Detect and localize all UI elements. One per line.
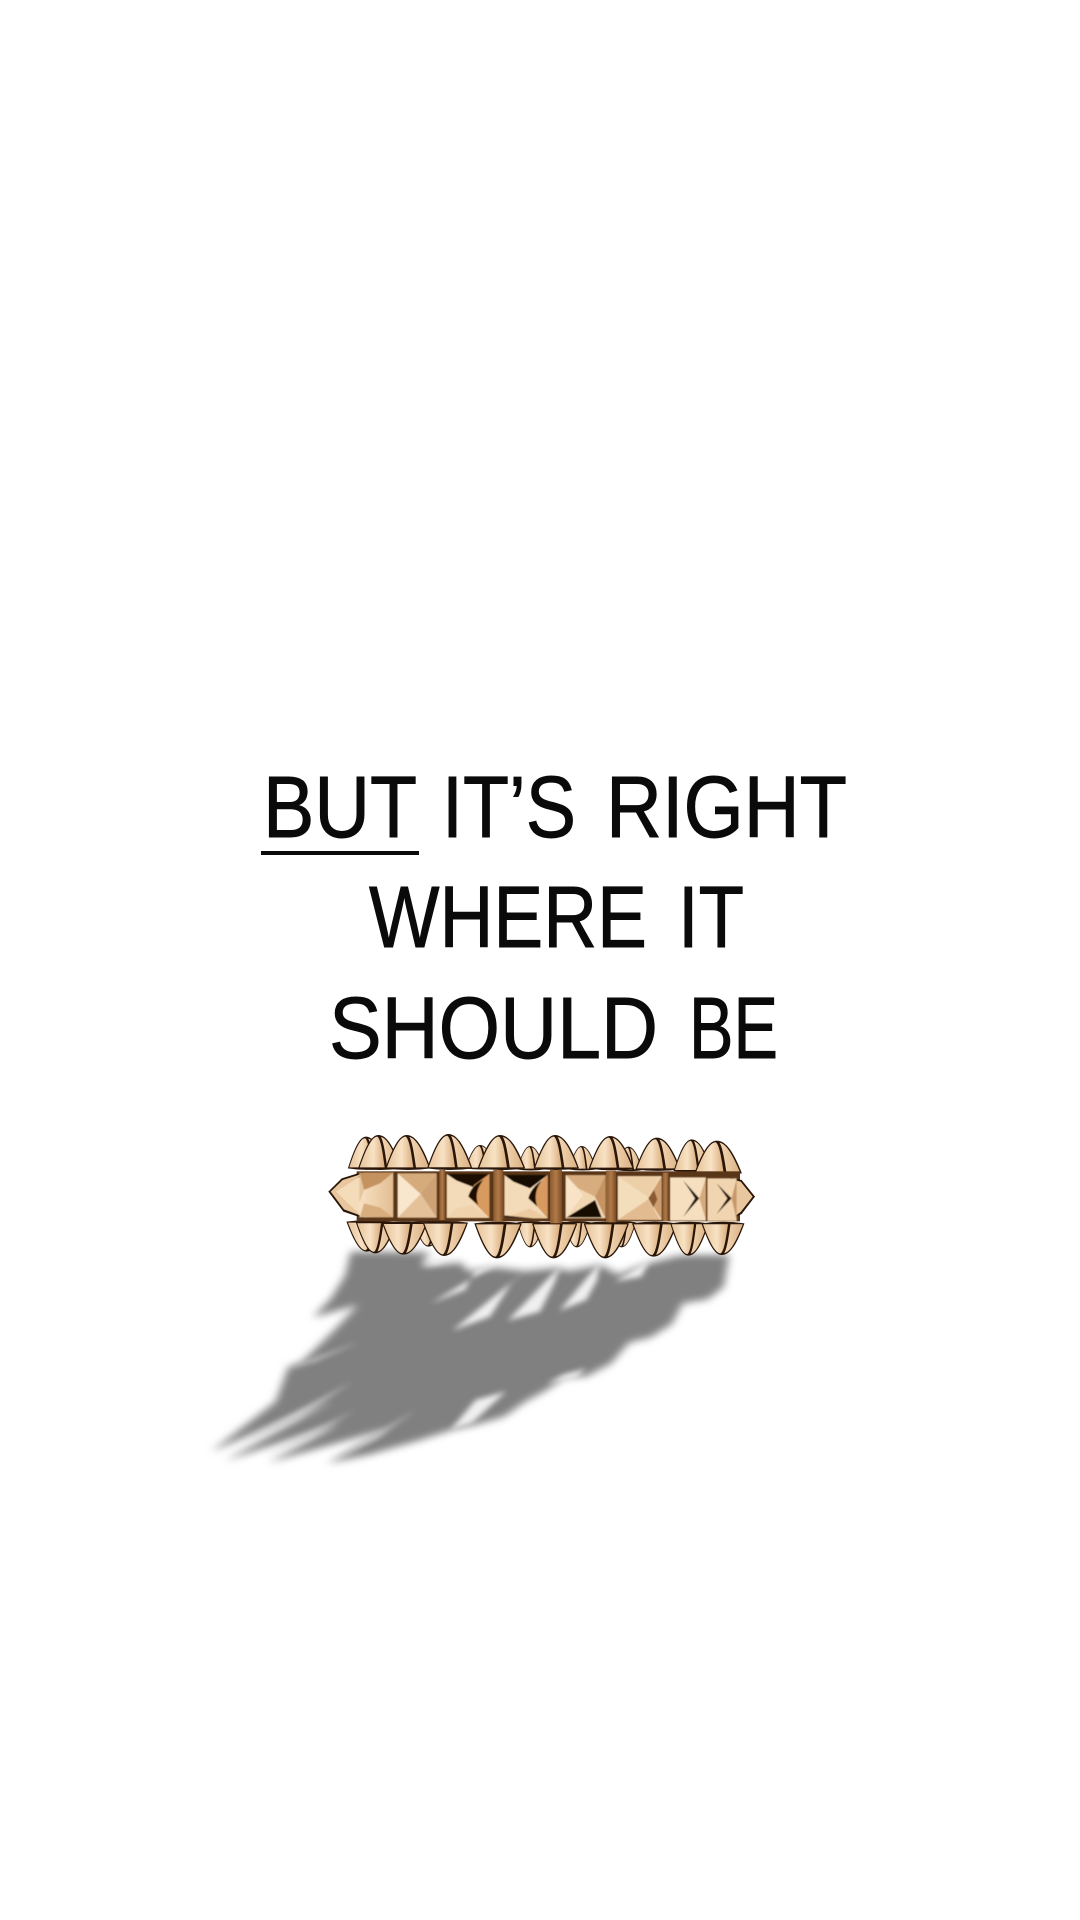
heading: but it's right where it should be: IT’S — [442, 759, 576, 856]
ring: bottom row of spikes — [356, 1221, 744, 1258]
heading: but it's right where it should be: BE — [689, 980, 778, 1077]
ring: right end tip — [730, 1177, 755, 1220]
ring: connecting bars — [439, 1170, 669, 1223]
ring: square studs — [359, 1173, 737, 1221]
ring: rear small spikes — [346, 1137, 643, 1252]
stud 1 — [359, 1173, 393, 1217]
ring: left end tip — [328, 1172, 363, 1218]
stud 2 — [398, 1173, 437, 1218]
stud 7 — [670, 1177, 706, 1221]
stud 8 — [707, 1178, 737, 1221]
heading: but it's right where it should be — [261, 759, 847, 1077]
heading: but it's right where it should be: RIGHT — [606, 759, 847, 856]
underline under BUT — [261, 851, 419, 855]
stud 3 — [447, 1174, 489, 1218]
stud 6 — [618, 1176, 662, 1220]
pale wedges in the lower shadow — [451, 1391, 506, 1430]
stud 4 — [504, 1175, 548, 1218]
heading: but it's right where it should be: WHERE — [369, 869, 647, 966]
pale wedges under the ring — [431, 1263, 497, 1303]
ring: top row of spikes — [358, 1134, 742, 1175]
stud 5 — [566, 1175, 606, 1218]
cast shadow of the ring — [211, 1240, 740, 1463]
ring: centre band dark link — [357, 1171, 740, 1221]
heading: but it's right where it should be: BUT — [263, 759, 417, 856]
heading: but it's right where it should be: SHOULD — [329, 980, 658, 1077]
heading: but it's right where it should be: IT — [678, 869, 744, 966]
ring band backing — [328, 1172, 755, 1218]
ring: gold studded band — [328, 1134, 755, 1258]
